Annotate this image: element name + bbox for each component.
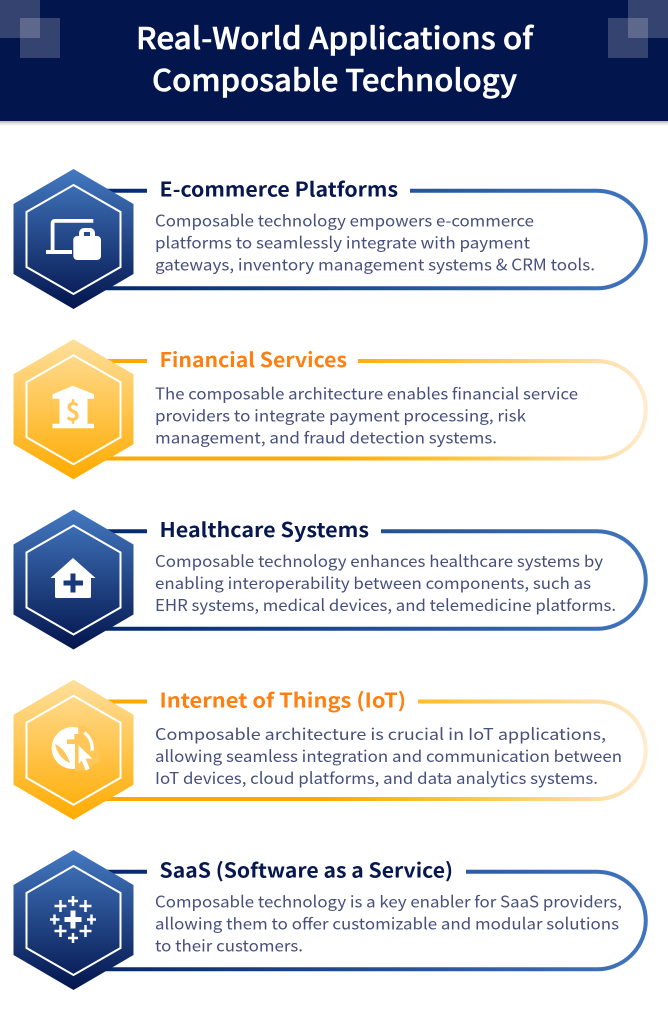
description: Composable technology enhances healthcare systems by bbox=[155, 548, 604, 572]
panel outline bbox=[105, 531, 646, 629]
description bbox=[155, 548, 616, 616]
title bbox=[136, 14, 535, 100]
description: Composable technology empowers e-commerce bbox=[155, 208, 534, 232]
description: Composable architecture is crucial in IoT applications, bbox=[155, 721, 606, 745]
description: providers to integrate payment processing, risk bbox=[155, 402, 526, 426]
heading: Financial Services bbox=[160, 344, 347, 373]
description: EHR systems, medical devices, and telemedicine platforms. bbox=[155, 592, 616, 616]
description: allowing them to offer customizable and modular solutions bbox=[155, 911, 619, 935]
description: IoT devices, cloud platforms, and data analytics systems. bbox=[155, 765, 598, 789]
item: Financial Services bbox=[14, 339, 646, 479]
description: gateways, inventory management systems & CRM tools. bbox=[155, 252, 595, 276]
item: E-commerce Platforms bbox=[14, 169, 646, 309]
icon: bank with dollar bbox=[52, 386, 94, 428]
icon: laptop and lock bbox=[46, 219, 101, 260]
item: Internet of Things (IoT) bbox=[14, 680, 646, 820]
item: SaaS (Software as a Service) bbox=[14, 850, 646, 990]
icon: bank with dollar: $ bbox=[66, 392, 80, 428]
description: Composable technology is a key enabler for SaaS providers, bbox=[155, 889, 622, 913]
hexagon badge bbox=[14, 680, 134, 820]
heading: E-commerce Platforms bbox=[160, 174, 398, 203]
hexagon badge bbox=[14, 510, 134, 650]
icon: grid of plus signs bbox=[50, 896, 96, 943]
hexagon badge bbox=[14, 850, 134, 990]
heading: Internet of Things (IoT) bbox=[160, 684, 406, 713]
heading: Healthcare Systems bbox=[160, 514, 369, 543]
decorative squares right bbox=[608, 0, 668, 58]
item: Healthcare Systems bbox=[14, 510, 646, 650]
description bbox=[155, 380, 578, 448]
decorative squares left bbox=[0, 0, 60, 58]
description bbox=[155, 208, 595, 276]
description bbox=[155, 721, 622, 789]
header banner bbox=[0, 0, 668, 126]
panel outline bbox=[105, 191, 646, 288]
icon: globe with cursor bbox=[52, 725, 100, 771]
description: management, and fraud detection systems. bbox=[155, 424, 497, 448]
panel outline bbox=[105, 701, 646, 799]
hexagon badge bbox=[14, 169, 134, 309]
title: Real-World Applications of bbox=[136, 14, 535, 58]
hexagon badge bbox=[14, 339, 134, 479]
title: Composable Technology bbox=[152, 56, 517, 100]
heading: SaaS (Software as a Service) bbox=[160, 855, 453, 884]
panel outline bbox=[105, 872, 646, 969]
description: to their customers. bbox=[155, 933, 303, 957]
description: The composable architecture enables financial service bbox=[155, 380, 578, 404]
panel outline bbox=[105, 361, 646, 459]
icon: house with cross bbox=[50, 558, 96, 598]
description: allowing seamless integration and communication between bbox=[155, 743, 622, 767]
description: enabling interoperability between components, such as bbox=[155, 570, 591, 594]
description: platforms to seamlessly integrate with payment bbox=[155, 230, 530, 254]
description bbox=[155, 889, 622, 957]
